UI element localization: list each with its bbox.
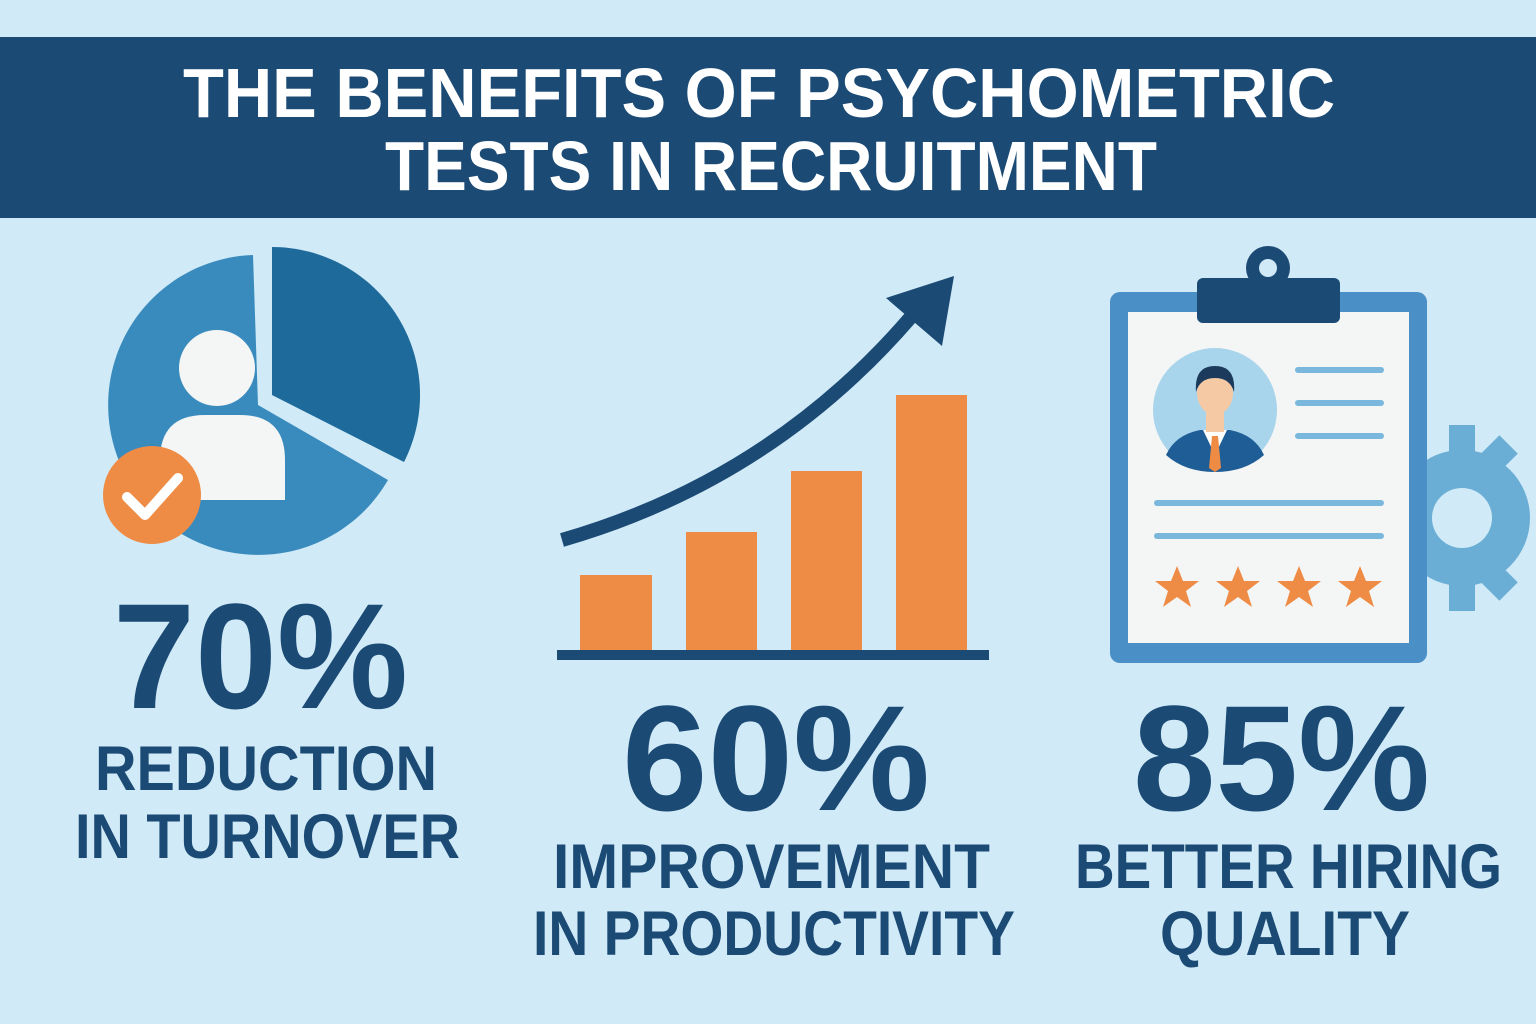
stat: 85% better hiring quality: 85% (1133, 674, 1430, 842)
title banner (0, 37, 1536, 218)
avatar (1153, 348, 1277, 472)
stars (1155, 566, 1382, 607)
stat: 70% reduction in turnover: REDUCTION (95, 734, 437, 804)
stat: 60% improvement in productivity (533, 674, 1015, 969)
stat: 60% improvement in productivity: 60% (622, 674, 930, 842)
title banner: TESTS IN RECRUITMENT (385, 127, 1157, 205)
icon: gear (1394, 425, 1530, 611)
stat: 70% reduction in turnover: 70% (113, 572, 408, 740)
arrow (562, 276, 954, 540)
icon: clipboard profile (1110, 246, 1427, 663)
stat: 85% better hiring quality: QUALITY (1160, 899, 1410, 969)
stat: 85% better hiring quality (1075, 674, 1502, 969)
stat: 70% reduction in turnover (75, 572, 460, 872)
icon: orange check badge (103, 446, 201, 544)
stat: 70% reduction in turnover: IN TURNOVER (75, 802, 460, 872)
stat: 60% improvement in productivity: IMPROVEMENT (553, 832, 990, 902)
title banner: THE BENEFITS OF PSYCHOMETRIC (183, 54, 1335, 132)
stat: 60% improvement in productivity: IN PRODUCTIVITY (533, 899, 1015, 969)
bar chart with rising arrow (557, 276, 989, 660)
icon: pie chart with person (103, 247, 420, 555)
